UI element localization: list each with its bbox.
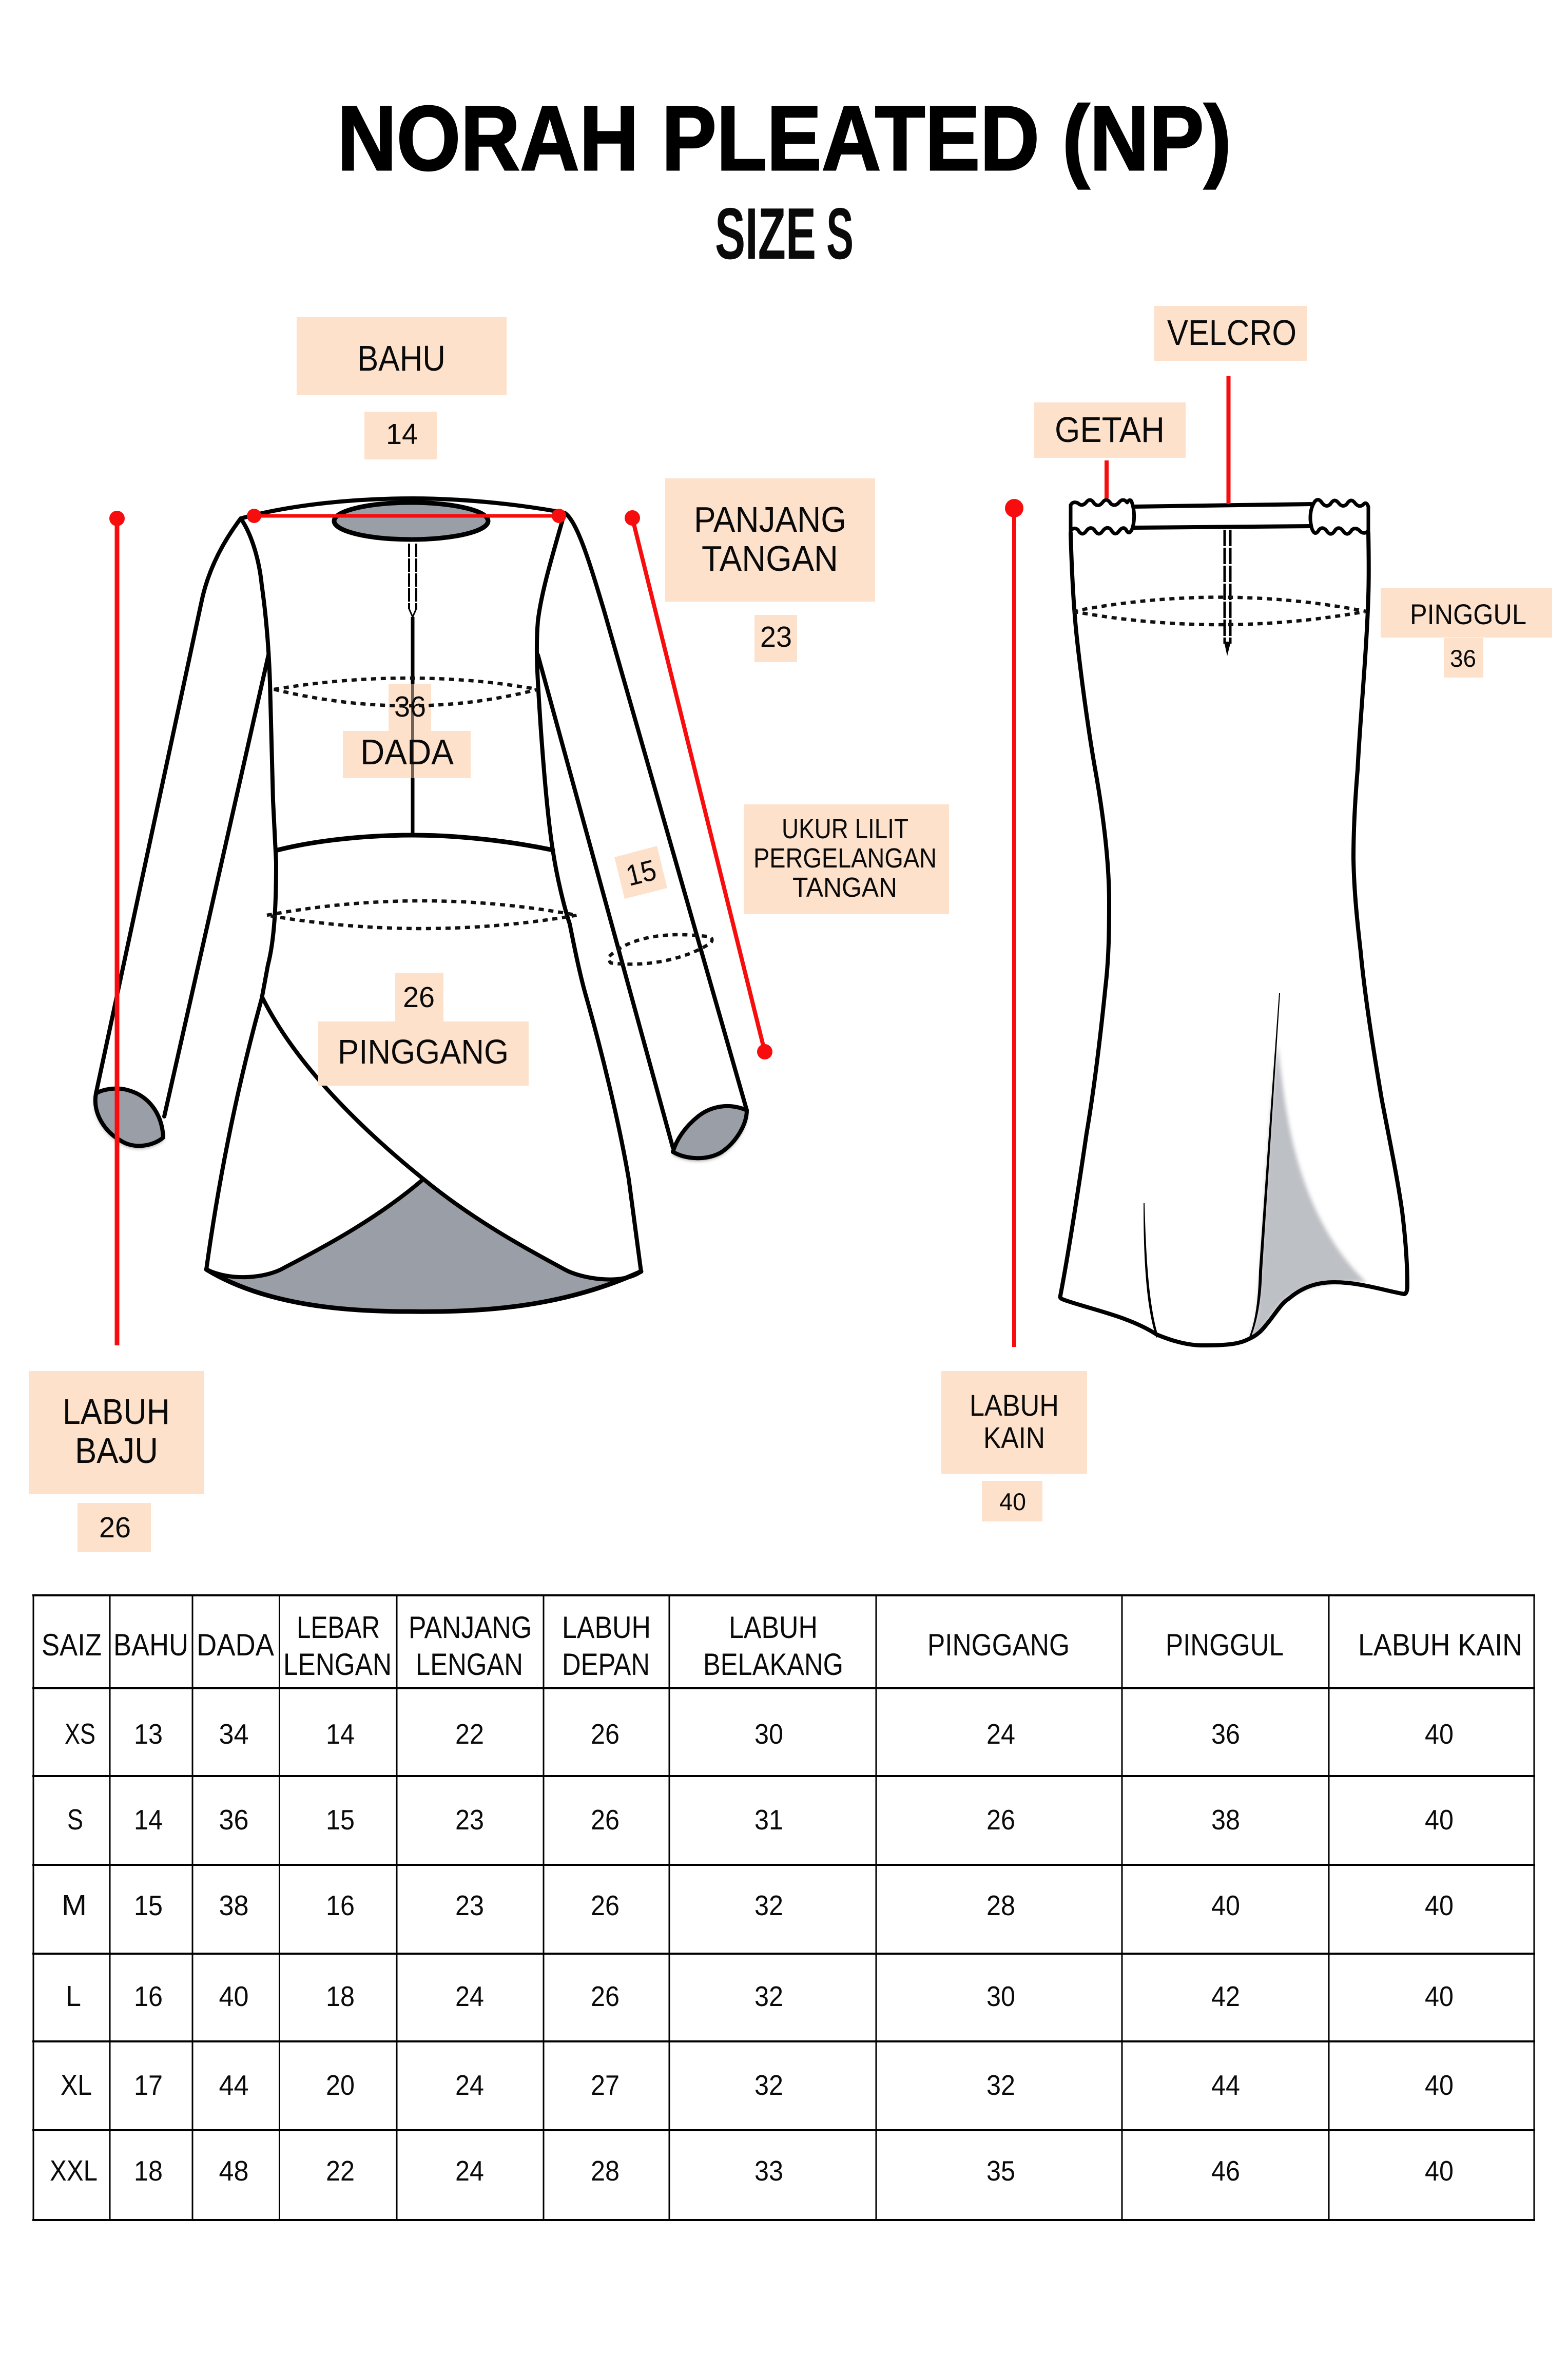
- row XL: 27: [591, 2069, 620, 2101]
- table header row: LABUH: [729, 1610, 818, 1645]
- panel: DADA measure: DADA: [360, 732, 454, 772]
- table header row: LABUH: [562, 1610, 651, 1645]
- panel: LABUH KAIN label: KAIN: [983, 1421, 1045, 1455]
- row XXL: 35: [986, 2155, 1015, 2187]
- waist dotted measure line: [267, 901, 577, 929]
- row XS: 13: [134, 1718, 163, 1750]
- size labels column: S: [67, 1803, 83, 1836]
- measure line: skirt length: [1005, 499, 1023, 1347]
- pleat line: [1144, 1203, 1158, 1338]
- table header row: PINGGANG: [927, 1628, 1070, 1662]
- row M: 26: [591, 1889, 620, 1921]
- row M: 38: [219, 1889, 248, 1921]
- row M: 16: [326, 1889, 355, 1921]
- row XS: 24: [986, 1718, 1015, 1750]
- value: wrist 15: 15: [623, 854, 660, 893]
- row XXL: 33: [754, 2155, 783, 2187]
- value: wrist 15: [614, 846, 667, 899]
- panel: BAHU label: [297, 317, 507, 395]
- wrap front curve: [263, 998, 641, 1280]
- zip placket: [1225, 530, 1230, 644]
- table header row: LENGAN: [416, 1647, 523, 1682]
- row L: [134, 1980, 1454, 2012]
- value: skirt length 40: 40: [999, 1488, 1026, 1515]
- measure line: sleeve length: [625, 510, 772, 1059]
- panel: UKUR LILIT PERGELANGAN TANGAN label: UKUR LILIT: [782, 814, 908, 844]
- row S: 14: [134, 1804, 163, 1836]
- panel: VELCRO label: VELCRO: [1167, 313, 1296, 353]
- skirt right side: [1353, 533, 1407, 1294]
- panel: LABUH KAIN label: [941, 1371, 1087, 1474]
- row L: 40: [1425, 1980, 1454, 2012]
- row XS: [134, 1718, 1454, 1750]
- panel: LABUH KAIN label: LABUH: [970, 1389, 1059, 1422]
- row XL: 32: [986, 2069, 1015, 2101]
- measure line: velcro pointer: [1227, 376, 1231, 504]
- chest dotted measure line: [274, 678, 538, 706]
- table header row: LEBAR: [297, 1610, 380, 1645]
- row S: 23: [455, 1804, 484, 1836]
- row S: 15: [326, 1804, 355, 1836]
- row XS: 34: [219, 1718, 248, 1750]
- size labels column: [50, 1718, 98, 2187]
- row L: 40: [219, 1980, 248, 2012]
- table header row: DEPAN: [562, 1647, 650, 1682]
- value: hip 36: 36: [1450, 645, 1476, 672]
- row L: 26: [591, 1980, 620, 2012]
- row L: 24: [455, 1980, 484, 2012]
- panel: LABUH BAJU label: BAJU: [75, 1431, 158, 1471]
- value: hip 36: [1444, 638, 1483, 678]
- panel: LABUH BAJU label: [29, 1371, 204, 1494]
- slit line: [1249, 993, 1280, 1339]
- table header row: LABUH KAIN: [1358, 1628, 1522, 1662]
- slit shadow: [1249, 1045, 1366, 1339]
- table grid: [32, 1594, 1535, 2221]
- title: NORAH PLEATED (NP): [337, 87, 1231, 189]
- measure line: shoulder: [247, 509, 566, 523]
- value: skirt length 40: [982, 1481, 1042, 1521]
- row S: 40: [1425, 1804, 1454, 1836]
- value: shoulder 14: [364, 412, 437, 459]
- row XS: 36: [1211, 1718, 1240, 1750]
- row L: 16: [134, 1980, 163, 2012]
- row XL: [134, 2069, 1454, 2101]
- value: waist 26: 26: [403, 981, 435, 1014]
- row XXL: 46: [1211, 2155, 1240, 2187]
- value: sleeve length 23: 23: [760, 621, 792, 653]
- left elastic gather: [1071, 500, 1134, 534]
- right cuff: [673, 1106, 747, 1158]
- size labels column: XXL: [50, 2154, 98, 2187]
- table header row: [42, 1610, 1522, 1682]
- wrist dotted measure line: [609, 935, 712, 964]
- measure line: getah pointer: [1105, 460, 1109, 498]
- hem: [206, 1269, 641, 1311]
- row M: 23: [455, 1889, 484, 1921]
- panel: PANJANG TANGAN label: TANGAN: [702, 538, 838, 578]
- table header row: BELAKANG: [703, 1647, 843, 1682]
- left sleeve: [96, 518, 241, 1093]
- size labels column: L: [66, 1980, 81, 2013]
- row L: 18: [326, 1980, 355, 2012]
- panel: VELCRO label: [1154, 306, 1307, 361]
- row S: 26: [591, 1804, 620, 1836]
- panel: PANJANG TANGAN label: PANJANG: [694, 499, 846, 539]
- skirt hem: [1060, 1282, 1404, 1345]
- row M: 15: [134, 1889, 163, 1921]
- row XXL: 48: [219, 2155, 248, 2187]
- row XXL: [134, 2155, 1454, 2187]
- row L: 32: [754, 1980, 783, 2012]
- right sleeve: [565, 513, 747, 1110]
- row XXL: 22: [326, 2155, 355, 2187]
- panel: PINGGANG label: [318, 1021, 529, 1086]
- panel: GETAH label: [1034, 402, 1186, 458]
- panel: GETAH label: GETAH: [1055, 410, 1165, 450]
- placket: [409, 544, 416, 609]
- row L: 42: [1211, 1980, 1240, 2012]
- value: waist 26: [395, 973, 443, 1021]
- row M: 40: [1425, 1889, 1454, 1921]
- left cuff: [95, 1089, 163, 1146]
- row XL: 44: [219, 2069, 248, 2101]
- row S: [134, 1804, 1454, 1836]
- subtitle: size S: SIZE: [715, 193, 816, 275]
- left body side: [206, 518, 276, 1269]
- garment: top / blouse technical drawing: [95, 498, 747, 1311]
- row XXL: 28: [591, 2155, 620, 2187]
- size chart table: [32, 1594, 1535, 2221]
- row M: 28: [986, 1889, 1015, 1921]
- row XL: 32: [754, 2069, 783, 2101]
- row XL: 20: [326, 2069, 355, 2101]
- inner hem panel: [218, 1179, 624, 1311]
- value: top length 26: [78, 1503, 151, 1552]
- table header row: LENGAN: [283, 1647, 392, 1682]
- row XS: 40: [1425, 1718, 1454, 1750]
- garment: skirt technical drawing: [1060, 499, 1407, 1345]
- panel: PINGGUL label: [1381, 588, 1552, 638]
- panel: DADA measure: [343, 684, 471, 778]
- panel: UKUR LILIT PERGELANGAN TANGAN label: PERGELANGAN: [753, 843, 937, 874]
- skirt left side: [1060, 533, 1109, 1296]
- row S: 31: [754, 1804, 783, 1836]
- label: DADA: [343, 731, 471, 778]
- panel: BAHU label: BAHU: [357, 338, 446, 378]
- table header row: BAHU: [113, 1628, 188, 1662]
- row M: 40: [1211, 1889, 1240, 1921]
- table header row: PANJANG: [409, 1610, 532, 1645]
- size labels column: M: [62, 1889, 87, 1922]
- centre front line: [411, 617, 415, 835]
- panel: LABUH BAJU label: LABUH: [63, 1392, 170, 1432]
- subtitle: size S: S: [826, 193, 854, 275]
- panel: UKUR LILIT PERGELANGAN TANGAN label: [744, 804, 949, 914]
- row XL: 40: [1425, 2069, 1454, 2101]
- row S: 26: [986, 1804, 1015, 1836]
- row XL: 24: [455, 2069, 484, 2101]
- neck opening: [334, 503, 488, 539]
- right elastic gather: [1310, 499, 1368, 534]
- panel: PINGGANG label: PINGGANG: [338, 1033, 509, 1071]
- row M: 32: [754, 1889, 783, 1921]
- value: chest 36: [389, 684, 431, 731]
- row XS: 30: [754, 1718, 783, 1750]
- panel: PINGGUL label: PINGGUL: [1410, 598, 1526, 630]
- row XS: 26: [591, 1718, 620, 1750]
- row XS: 22: [455, 1718, 484, 1750]
- panel: PANJANG TANGAN label: [665, 478, 875, 602]
- size labels column: XS: [65, 1718, 95, 1750]
- right body side: [537, 513, 641, 1271]
- table header row: SAIZ: [42, 1628, 102, 1662]
- waistband centre: [1134, 504, 1311, 528]
- size labels column: XL: [61, 2069, 92, 2101]
- table header row: PINGGUL: [1166, 1628, 1284, 1662]
- row XXL: 18: [134, 2155, 163, 2187]
- row XXL: 24: [455, 2155, 484, 2187]
- row L: 30: [986, 1980, 1015, 2012]
- shoulder arc: [241, 498, 565, 518]
- waist seam: [278, 835, 553, 850]
- row XXL: 40: [1425, 2155, 1454, 2187]
- value: shoulder 14: 14: [386, 418, 418, 451]
- row XL: 17: [134, 2069, 163, 2101]
- table header row: DADA: [197, 1628, 274, 1662]
- row XL: 44: [1211, 2069, 1240, 2101]
- panel: DADA measure: 36: [394, 690, 426, 723]
- row S: 36: [219, 1804, 248, 1836]
- value: sleeve length 23: [754, 615, 797, 662]
- hip dotted measure line: [1073, 597, 1366, 625]
- measure line: top length: [109, 511, 125, 1345]
- cuff shadows: [95, 1091, 747, 1160]
- row M: [134, 1889, 1454, 1921]
- row XS: 14: [326, 1718, 355, 1750]
- value: top length 26: 26: [99, 1511, 131, 1544]
- panel: UKUR LILIT PERGELANGAN TANGAN label: TANGAN: [792, 872, 897, 903]
- row S: 38: [1211, 1804, 1240, 1836]
